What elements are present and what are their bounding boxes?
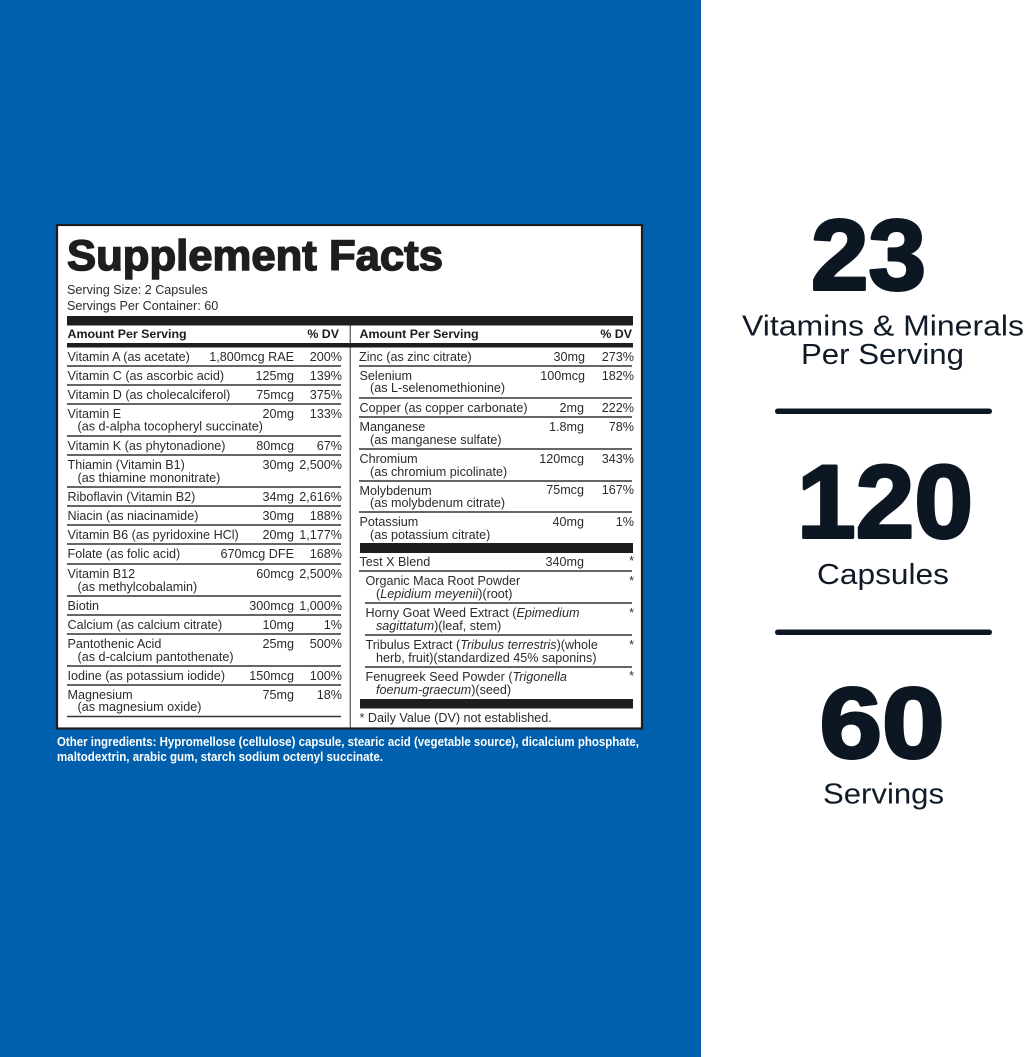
table: left nutrient column: Niacin (as niacinamide) (68, 509, 198, 523)
table: right nutrient column: Copper (as copper carbonate) (360, 401, 528, 415)
blue background panel (0, 0, 701, 1057)
serving information: Serving Size: 2 Capsules (67, 283, 208, 297)
table: right nutrient column: Manganese (360, 420, 425, 434)
stat: 23 vitamins and minerals: Per Serving (801, 339, 964, 371)
table: right nutrient column: 167% (602, 483, 634, 497)
table: right nutrient column: % DV (600, 327, 633, 341)
table: left nutrient column: Biotin (68, 599, 99, 613)
table: left nutrient column: (as thiamine mononitrate) (78, 471, 220, 485)
table: left nutrient column: 30mg (262, 509, 294, 523)
table: right nutrient column: 1.8mg (549, 420, 584, 434)
table: right nutrient column: Amount Per Serving (360, 327, 479, 341)
table: left nutrient column: 125mg (255, 369, 294, 383)
table: left nutrient column: 1,800mcg RAE (209, 350, 294, 364)
table: right nutrient column: (as chromium picolinate) (370, 465, 507, 479)
table: left nutrient column: 1,177% (299, 528, 342, 542)
stat: 120 capsules: Capsules (817, 559, 949, 591)
table: right nutrient column: 40mg (552, 515, 584, 529)
table: left nutrient column: Folate (as folic acid) (68, 547, 180, 561)
table: left nutrient column: (as methylcobalamin) (78, 580, 197, 594)
table: left nutrient column: Amount Per Serving (68, 327, 187, 341)
stat: 23 vitamins and minerals: Vitamins & Minerals (742, 310, 1024, 342)
divider (775, 408, 992, 414)
table: right nutrient column: (as manganese sulfate) (370, 433, 502, 447)
table: left nutrient column: Vitamin E (68, 407, 121, 421)
table: left nutrient column: 670mcg DFE (220, 547, 294, 561)
table: left nutrient column: 20mg (262, 528, 294, 542)
other ingredients note: Other ingredients: Hypromellose (cellulose) capsule, stearic acid (vegetable source), dicalcium phosphate, (57, 734, 639, 749)
table: left nutrient column: Vitamin B6 (as pyridoxine HCl) (68, 528, 239, 542)
table: right nutrient column: Chromium (360, 452, 418, 466)
table: left nutrient column: 1,000% (299, 599, 342, 613)
table: right nutrient column: * (629, 606, 634, 620)
table: left nutrient column: 133% (310, 407, 342, 421)
table: right nutrient column: 343% (602, 452, 634, 466)
table: left nutrient column: 18% (317, 688, 342, 702)
table: left nutrient column: (as magnesium oxide) (78, 700, 201, 714)
table: right nutrient column: herb, fruit)(standardized 45% saponins) (376, 651, 597, 665)
table: right nutrient column: Organic Maca Root Powder (366, 574, 520, 588)
table: left nutrient column: 1% (324, 618, 342, 632)
table: left nutrient column: 168% (310, 547, 342, 561)
table: left nutrient column: 2,616% (299, 490, 342, 504)
stat: 23 vitamins and minerals: 23 (811, 200, 926, 312)
table: left nutrient column: Vitamin B12 (68, 567, 135, 581)
table: right nutrient column: * (629, 554, 634, 568)
table: right nutrient column: * (629, 669, 634, 683)
table: left nutrient column: Iodine (as potassium iodide) (68, 669, 225, 683)
stat: 120 capsules: 120 (797, 444, 973, 560)
table: right nutrient column: Potassium (360, 515, 418, 529)
table: left nutrient column: 200% (310, 350, 342, 364)
table: left nutrient column: 300mcg (249, 599, 294, 613)
table: left nutrient column: 2,500% (299, 567, 342, 581)
table: left nutrient column: Vitamin A (as acetate) (68, 350, 190, 364)
table: right nutrient column: Test X Blend (360, 555, 430, 569)
table: right nutrient column: Selenium (360, 369, 412, 383)
table: left nutrient column: 150mcg (249, 669, 294, 683)
table: left nutrient column: 100% (310, 669, 342, 683)
table: left nutrient column: 188% (310, 509, 342, 523)
table: left nutrient column: 75mcg (256, 388, 294, 402)
table: right nutrient column: * Daily Value (DV) not established. (360, 711, 552, 725)
table: right nutrient column: 222% (602, 401, 634, 415)
table: left nutrient column: Calcium (as calcium citrate) (68, 618, 222, 632)
table: right nutrient column: (as potassium citrate) (370, 528, 490, 542)
table: left nutrient column: Thiamin (Vitamin B1) (68, 458, 185, 472)
table: left nutrient column: 60mcg (256, 567, 294, 581)
table: right nutrient column: 2mg (560, 401, 584, 415)
table: left nutrient column: 75mg (262, 688, 294, 702)
table: left nutrient column: 20mg (262, 407, 294, 421)
table: right nutrient column: 30mg (553, 350, 585, 364)
table: right nutrient column: 120mcg (539, 452, 584, 466)
table: right nutrient column: (as L-selenomethionine) (370, 381, 505, 395)
table: left nutrient column: Vitamin K (as phytonadione) (68, 439, 225, 453)
table: left nutrient column: 375% (310, 388, 342, 402)
stat: 60 servings: Servings (823, 778, 944, 810)
table: left nutrient column: 30mg (262, 458, 294, 472)
table: right nutrient column: * (629, 638, 634, 652)
table: right nutrient column: 75mcg (546, 483, 584, 497)
table: right nutrient column: Zinc (as zinc citrate) (359, 350, 472, 364)
table: right nutrient column: 1% (616, 515, 634, 529)
table: left nutrient column: 500% (310, 637, 342, 651)
table: left nutrient column (67, 316, 350, 716)
table: left nutrient column: 139% (310, 369, 342, 383)
table: left nutrient column: 25mg (262, 637, 294, 651)
divider (775, 630, 992, 635)
table: right nutrient column: 340mg (545, 555, 584, 569)
table: right nutrient column: sagittatum)(leaf, stem) (376, 619, 501, 633)
panel: supplement facts label (57, 225, 642, 728)
table: left nutrient column: (as d-calcium pantothenate) (78, 650, 234, 664)
table: right nutrient column: Fenugreek Seed Powder (Trigonella (366, 670, 567, 684)
table: left nutrient column: Riboflavin (Vitamin B2) (68, 490, 195, 504)
stat: 60 servings (820, 668, 944, 810)
table: left nutrient column: Vitamin C (as ascorbic acid) (68, 369, 224, 383)
stat: 23 vitamins and minerals (742, 200, 1024, 371)
heading: Supplement Facts: Supplement Facts (67, 232, 443, 280)
column divider (350, 316, 351, 728)
table: right nutrient column: Horny Goat Weed Extract (Epimedium (366, 606, 579, 620)
stat: 60 servings: 60 (820, 668, 944, 780)
table: left nutrient column: Vitamin D (as cholecalciferol) (68, 388, 230, 402)
table: right nutrient column: foenum-graecum)(seed) (376, 683, 511, 697)
table: right nutrient column (350, 316, 634, 725)
other ingredients note (57, 734, 639, 764)
table: left nutrient column: 10mg (262, 618, 294, 632)
table: left nutrient column: Magnesium (68, 688, 133, 702)
table: left nutrient column: % DV (307, 327, 340, 341)
table: right nutrient column: 100mcg (540, 369, 585, 383)
serving information (67, 283, 218, 313)
table: right nutrient column: (Lepidium meyenii)(root) (376, 587, 513, 601)
table: right nutrient column: Molybdenum (360, 484, 432, 498)
table: left nutrient column: 34mg (262, 490, 294, 504)
table: right nutrient column: Tribulus Extract (Tribulus terrestris)(whole (366, 638, 598, 652)
table: right nutrient column: 273% (602, 350, 634, 364)
serving information: Servings Per Container: 60 (67, 299, 218, 313)
other ingredients note: maltodextrin, arabic gum, starch sodium octenyl succinate. (57, 749, 383, 764)
table: right nutrient column: (as molybdenum citrate) (370, 496, 505, 510)
table: left nutrient column: 67% (317, 439, 342, 453)
table: right nutrient column: 78% (609, 420, 634, 434)
table: left nutrient column: Pantothenic Acid (68, 637, 161, 651)
table: left nutrient column: 80mcg (256, 439, 294, 453)
table: right nutrient column: * (629, 574, 634, 588)
table: right nutrient column: 182% (602, 369, 634, 383)
table: left nutrient column: 2,500% (299, 458, 342, 472)
table: left nutrient column: (as d-alpha tocopheryl succinate) (78, 420, 263, 434)
